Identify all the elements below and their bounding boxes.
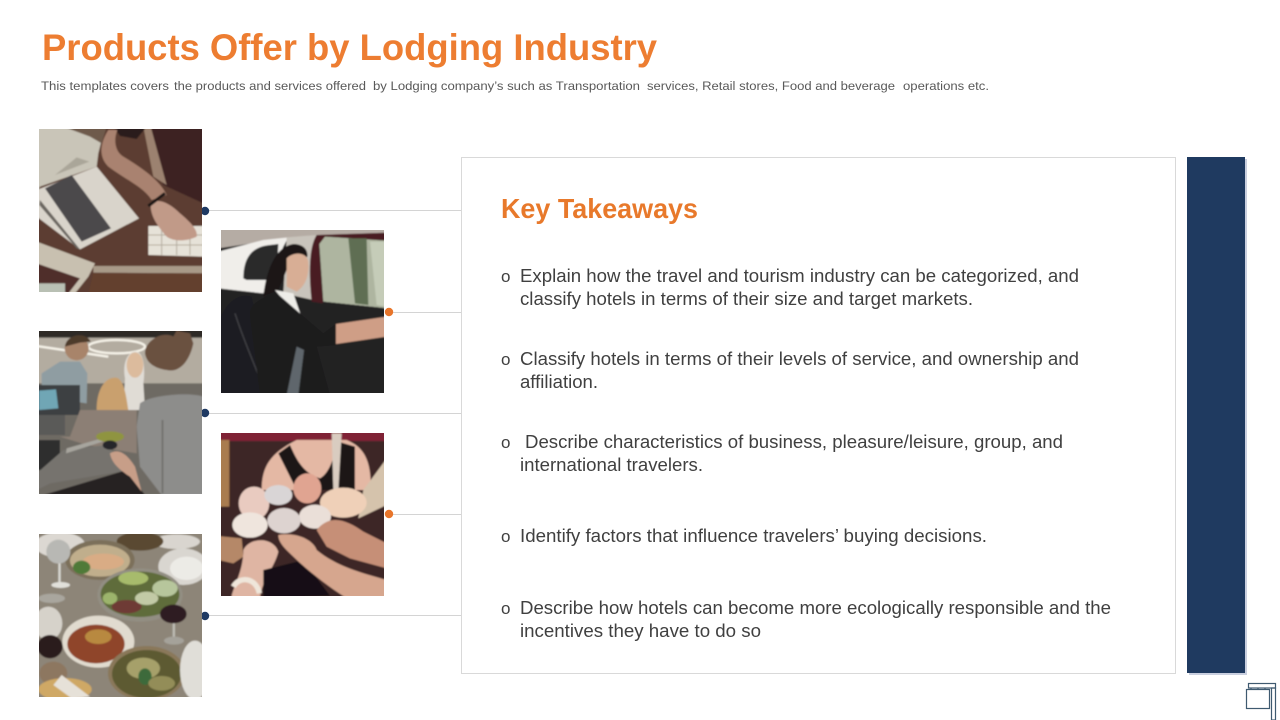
takeaway 4: Identify factors that influence travelers’ buying decisions.: [520, 525, 987, 546]
takeaway 2: Classify hotels in terms of their levels of service, and ownership and: [520, 348, 1079, 369]
takeaway 3: o: [501, 433, 510, 452]
takeaway 1: Explain how the travel and tourism industry can be categorized, and: [520, 265, 1079, 286]
takeaway 2: [501, 348, 1079, 392]
takeaway 3: [501, 431, 1063, 475]
subtitle: operations etc.: [903, 79, 989, 93]
title: Products Offer by Lodging Industry: [42, 27, 657, 68]
takeaway 2: o: [501, 350, 510, 369]
takeaway 5: Describe how hotels can become more ecologically responsible and the: [520, 597, 1111, 618]
photo: checkout counter in a retail store: [37, 328, 203, 495]
takeaway 2: affiliation.: [520, 371, 598, 392]
photo: laptop and keyboard on a desk: [37, 127, 203, 293]
takeaway 1: o: [501, 267, 510, 286]
connector lines and dots: [201, 207, 461, 620]
subtitle: the products and services offered: [174, 79, 366, 93]
photo: glasses raised in a toast: [218, 432, 387, 598]
takeaway 4: o: [501, 527, 510, 546]
navy side bar: [1187, 157, 1247, 675]
photo: dinner table with plates of food: [39, 534, 202, 697]
icon: corner hanging sign: [1246, 684, 1276, 720]
panel: key takeaways: [462, 158, 1176, 674]
takeaway 5: [501, 597, 1111, 641]
takeaway 3: international travelers.: [520, 454, 703, 475]
panel heading: Key Takeaways: [501, 193, 698, 224]
photo: woman driving a car: [218, 228, 387, 395]
takeaway 3: Describe characteristics of business, pleasure/leisure, group, and: [525, 431, 1063, 452]
subtitle: This templates covers: [41, 79, 169, 93]
subtitle: services, Retail stores, Food and beverage: [647, 79, 895, 93]
takeaway 5: incentives they have to do so: [520, 620, 761, 641]
subtitle: [41, 79, 989, 93]
subtitle: by Lodging company’s such as Transportation: [373, 79, 640, 93]
takeaway 5: o: [501, 599, 510, 618]
takeaway 1: classify hotels in terms of their size and target markets.: [520, 288, 973, 309]
takeaway 1: [501, 265, 1079, 309]
